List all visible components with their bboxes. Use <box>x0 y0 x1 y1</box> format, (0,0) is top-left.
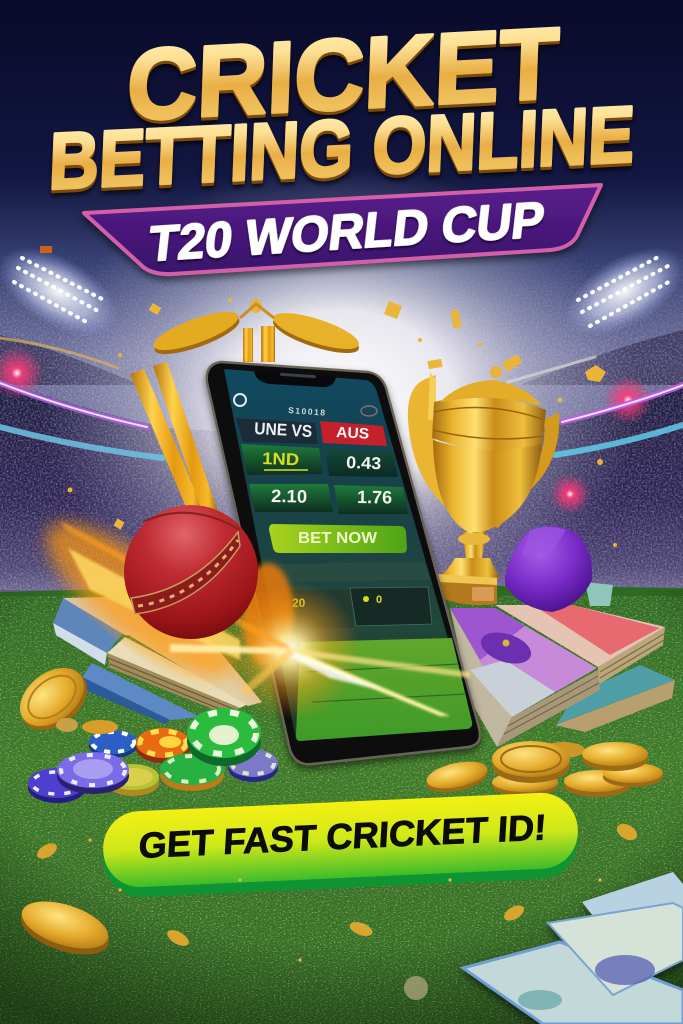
floodlights right <box>551 230 683 354</box>
lower stats panels: 0 <box>376 594 382 606</box>
cricket ball <box>124 505 258 639</box>
odds row one: 1ND <box>262 449 300 469</box>
chip: green large <box>187 708 261 766</box>
phone <box>207 362 480 764</box>
green field panel <box>296 638 472 741</box>
poker chips <box>28 708 278 803</box>
chip: green small <box>160 753 224 791</box>
team row <box>236 418 387 446</box>
banner: T20 World Cup: T20 WORLD CUP <box>146 192 547 272</box>
call to action button <box>101 791 580 899</box>
chip: purple low <box>28 768 86 803</box>
bet now button: BET NOW <box>298 530 378 547</box>
bet now button <box>269 524 407 553</box>
purple gem die <box>505 526 592 612</box>
title: CRICKET: CRICKET <box>125 6 561 142</box>
scattered small coins on grass <box>34 820 640 1000</box>
floodlights left <box>0 230 132 354</box>
gold coins left <box>9 656 118 742</box>
large coin bottom left <box>15 892 115 964</box>
odds row two: 2.10 <box>271 486 307 507</box>
odds row one <box>241 444 398 477</box>
banner: T20 World Cup <box>84 185 601 274</box>
chip: gold green <box>107 764 159 796</box>
phone screen <box>224 369 472 741</box>
chip: purple right <box>228 749 278 782</box>
odds row one: 0.43 <box>346 453 382 473</box>
phone screen: S10018 <box>288 405 326 418</box>
title: BETTING ONLINE: BETTING ONLINE <box>47 89 636 206</box>
explosion glow and sparks <box>26 499 470 720</box>
chip: purple large <box>57 752 129 794</box>
cash bottom right <box>463 872 683 1024</box>
gold confetti and sparks <box>40 246 617 962</box>
gold coins right <box>424 741 663 797</box>
team row: AUS <box>336 424 370 443</box>
chip: blue <box>89 730 137 758</box>
chip: orange <box>136 728 190 763</box>
cash stack left <box>53 597 262 724</box>
cash stack right <box>450 582 675 747</box>
team row: UNE VS <box>254 419 313 441</box>
lower stats panels: 20 <box>292 596 306 610</box>
lower stats panels <box>272 562 432 628</box>
call to action button: GET FAST CRICKET ID! <box>138 806 548 866</box>
golden bails and stumps top <box>150 299 363 362</box>
stadium light bands <box>0 338 683 458</box>
trophy <box>408 366 559 605</box>
odds row two: 1.76 <box>357 487 392 508</box>
odds row two <box>249 484 408 514</box>
background: night sky and stadium <box>0 96 683 592</box>
grass field <box>0 586 683 1024</box>
golden stumps left <box>130 362 218 512</box>
